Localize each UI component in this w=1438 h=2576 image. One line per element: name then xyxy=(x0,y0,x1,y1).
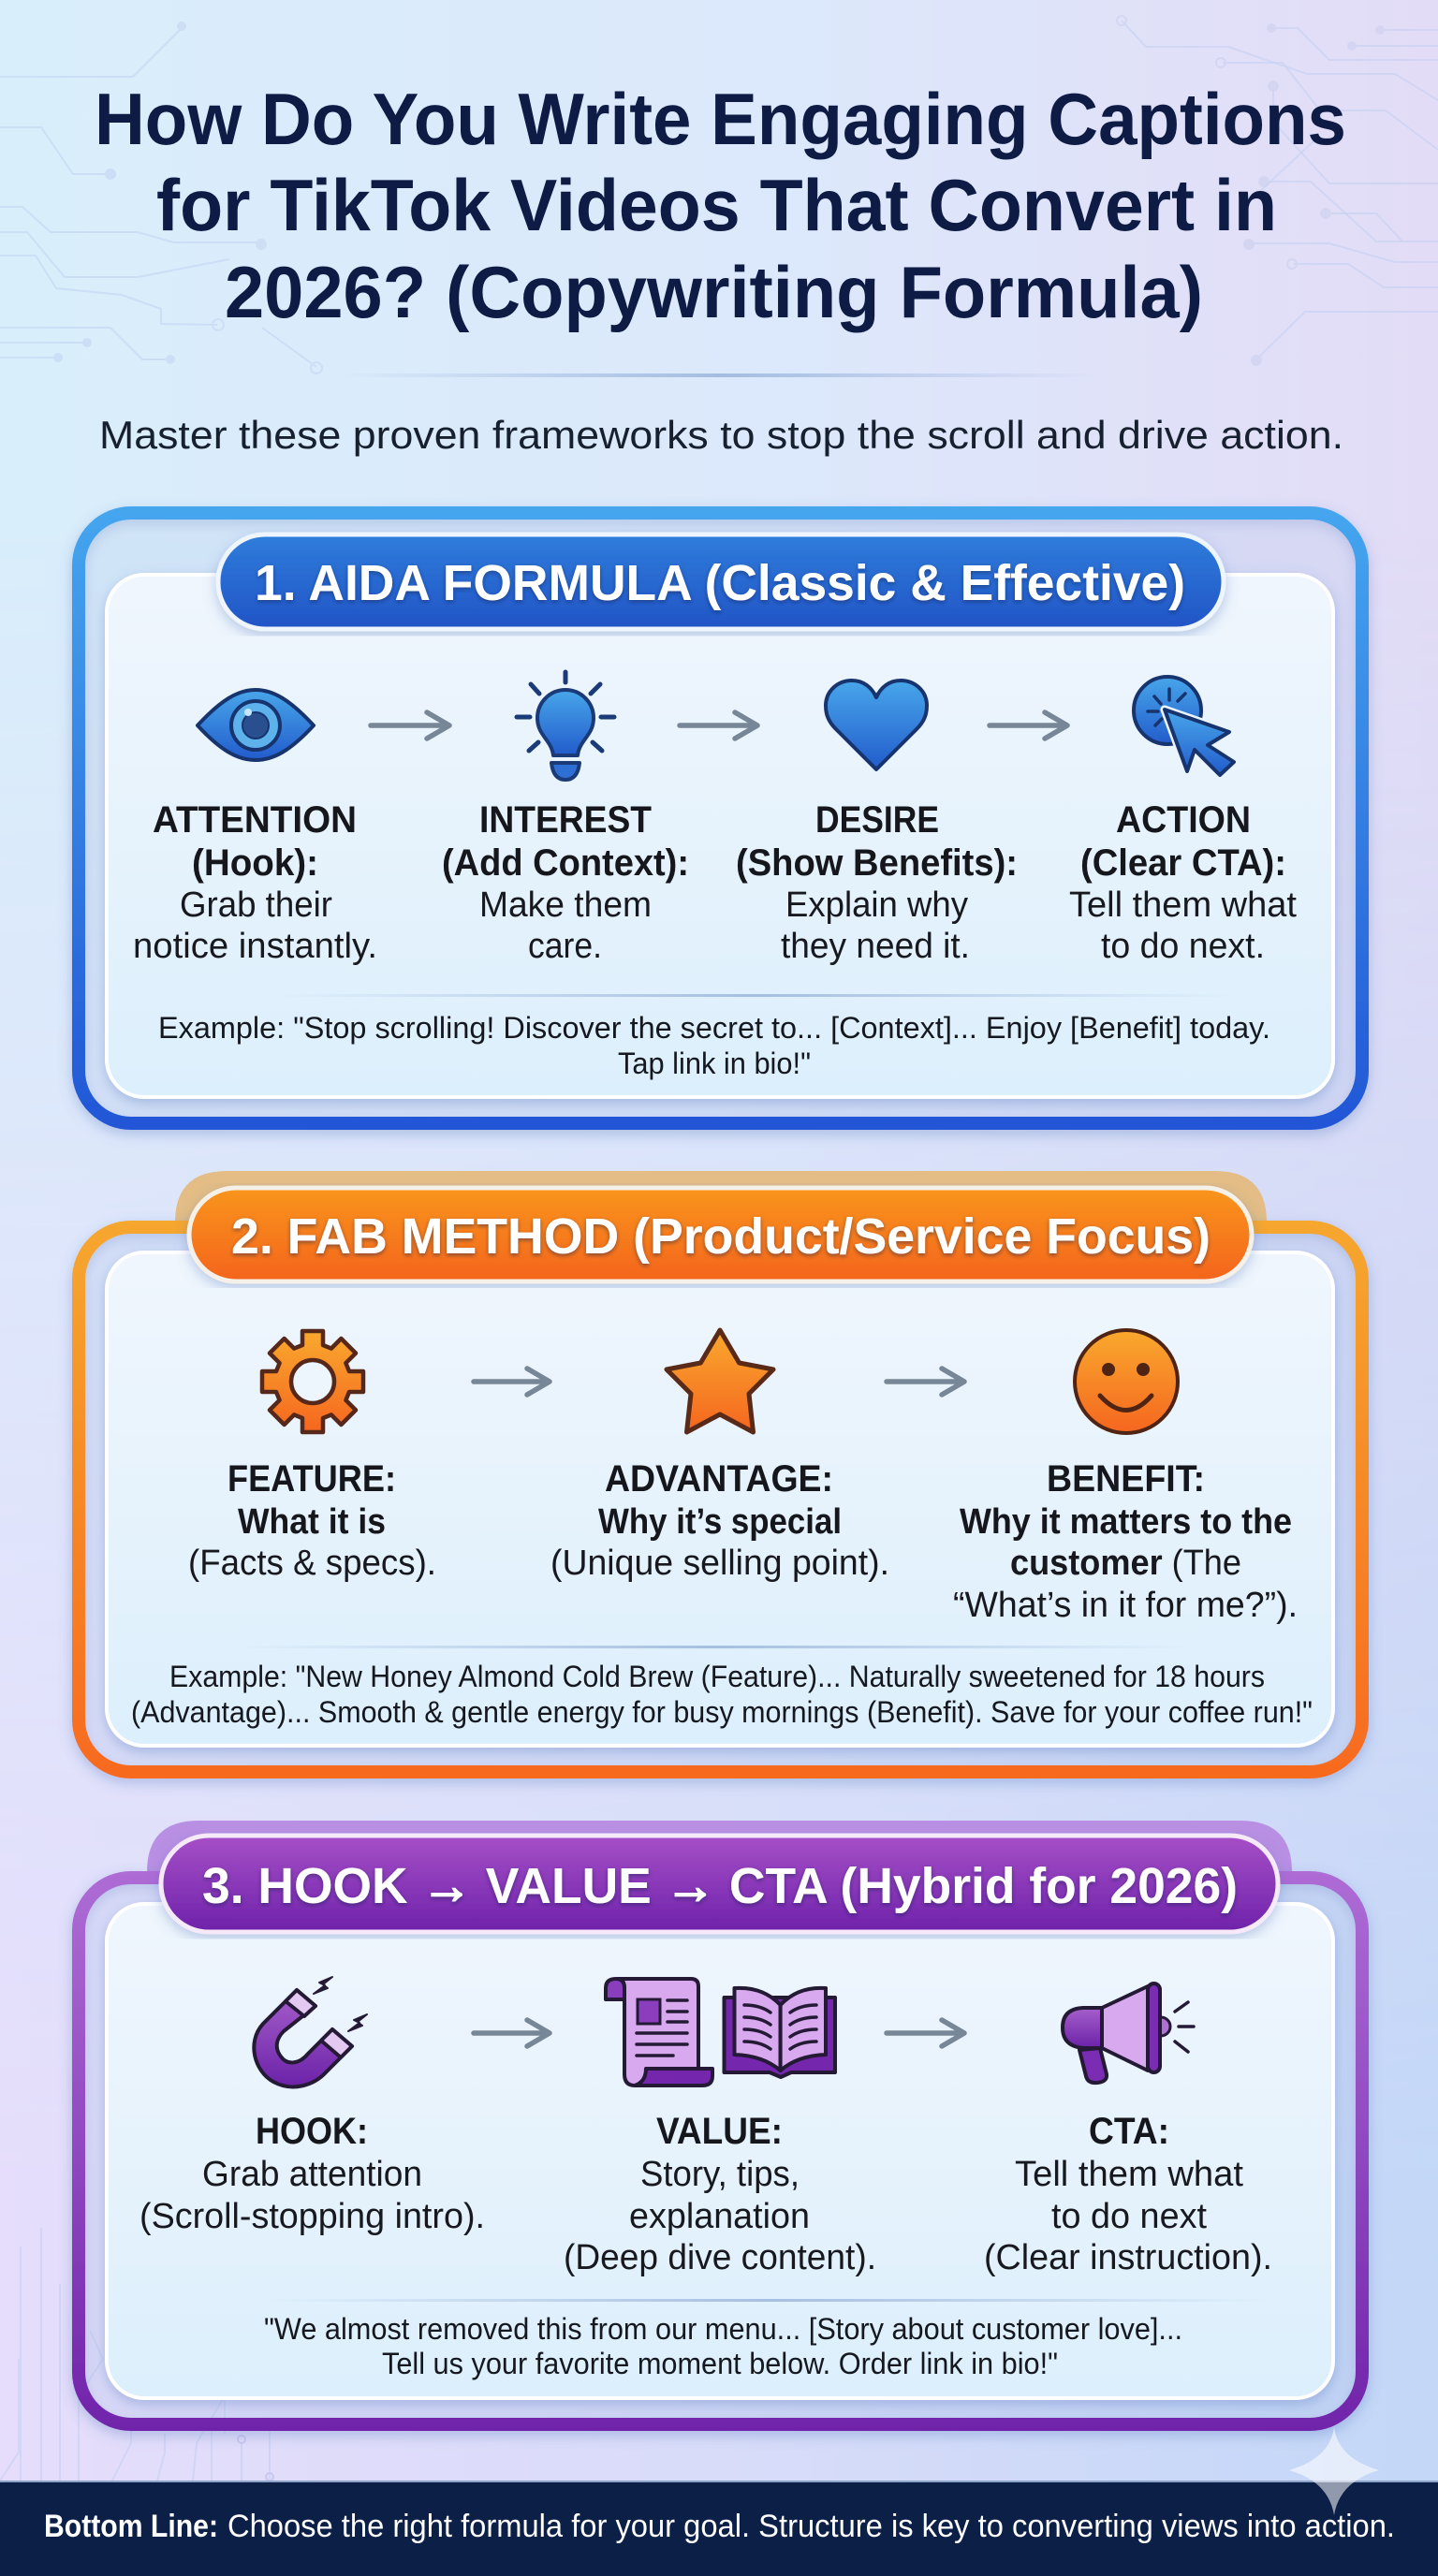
column: benefit xyxy=(953,1458,1298,1625)
column: advantage: (Unique selling point). xyxy=(550,1544,889,1583)
title: How Do You Write Engaging Captions xyxy=(95,78,1346,160)
step: desire: Explain why xyxy=(785,886,968,925)
arrow xyxy=(474,2020,550,2046)
step: desire: they need it. xyxy=(781,927,970,966)
step: interest: care. xyxy=(528,927,602,966)
example text: Hook Value CTA: Tell us your favorite moment below. Order link in bio!" xyxy=(382,2347,1058,2380)
icon: megaphone xyxy=(1063,1983,1194,2083)
column: benefit: “What’s in it for me?”). xyxy=(953,1586,1298,1625)
step: action: to do next. xyxy=(1101,927,1265,966)
step: interest xyxy=(442,799,689,966)
column: cta: (Clear instruction). xyxy=(984,2238,1272,2277)
column: hook: Grab attention xyxy=(202,2155,422,2194)
column: advantage: Why it’s special xyxy=(598,1502,842,1542)
arrow xyxy=(887,1368,964,1395)
arrow xyxy=(474,1368,550,1395)
step: desire xyxy=(736,799,1018,966)
step: action: Tell them what xyxy=(1069,886,1297,925)
heading pill: Hook Value CTA: 3. HOOK → VALUE → CTA (Hybrid for 2026) xyxy=(202,1858,1238,1914)
step: action: ACTION xyxy=(1116,799,1251,841)
icon: heart xyxy=(826,681,927,769)
heading pill: AIDA: 1. AIDA FORMULA (Classic & Effective) xyxy=(255,555,1185,611)
column: benefit: BENEFIT: xyxy=(1047,1458,1205,1500)
column: cta: to do next xyxy=(1051,2197,1207,2236)
column: cta: Tell them what xyxy=(1015,2155,1243,2194)
icon: eye xyxy=(198,690,314,760)
column: feature: (Facts & specs). xyxy=(188,1544,436,1583)
icon: star xyxy=(667,1330,773,1432)
column: value: VALUE: xyxy=(656,2111,783,2152)
example text: FAB: (Advantage)... Smooth & gentle energy for busy mornings (Benefit). Save for your coffee run!" xyxy=(131,1695,1313,1729)
icon: magnet xyxy=(254,1977,367,2086)
heading pill: FAB xyxy=(189,1188,1252,1281)
step: attention: (Hook): xyxy=(192,842,318,884)
step: interest: Make them xyxy=(479,886,652,925)
example text: FAB xyxy=(131,1660,1313,1729)
icon: smiley xyxy=(1075,1330,1178,1433)
example text: AIDA: Example: "Stop scrolling! Discover the secret to... [Context]... Enjoy [Benefit] today. xyxy=(158,1011,1270,1045)
heading pill: Hook Value CTA xyxy=(161,1836,1278,1932)
circuit pattern: top left xyxy=(0,22,322,373)
step: desire: DESIRE xyxy=(815,799,939,841)
step: attention: Grab their xyxy=(180,886,332,925)
step: attention: notice instantly. xyxy=(133,927,377,966)
example text: AIDA: Tap link in bio!" xyxy=(618,1046,811,1080)
column: feature: FEATURE: xyxy=(227,1458,396,1500)
column: hook: HOOK: xyxy=(256,2111,368,2152)
step: desire: (Show Benefits): xyxy=(736,842,1018,884)
footer bar: Choose the right formula for your goal. Structure is key to converting views into action. xyxy=(227,2509,1395,2544)
step: attention: ATTENTION xyxy=(153,799,357,841)
title: for TikTok Videos That Convert in xyxy=(156,164,1277,246)
example text: FAB: Example: "New Honey Almond Cold Brew (Feature)... Naturally sweetened for 18 hours xyxy=(169,1660,1265,1693)
circuit pattern: bottom left xyxy=(0,2228,273,2481)
icon: gear xyxy=(262,1331,363,1432)
icon: scroll and book xyxy=(606,1979,835,2086)
panel: FAB method xyxy=(79,1171,1362,1772)
column: feature: What it is xyxy=(238,1502,386,1542)
example text: AIDA xyxy=(158,1011,1270,1080)
column: advantage: ADVANTAGE: xyxy=(605,1458,833,1500)
subtitle: Master these proven frameworks to stop the scroll and drive action. xyxy=(99,413,1343,457)
column: feature xyxy=(188,1458,436,1583)
step: interest: INTEREST xyxy=(479,799,652,841)
column: cta xyxy=(984,2111,1272,2277)
step: attention xyxy=(133,799,377,966)
example text: Hook Value CTA: "We almost removed this from our menu... [Story about customer love]... xyxy=(264,2312,1182,2346)
arrow xyxy=(371,712,449,739)
step: interest: (Add Context): xyxy=(442,842,689,884)
column: value: (Deep dive content). xyxy=(564,2238,876,2277)
column: hook: (Scroll-stopping intro). xyxy=(139,2197,485,2236)
column: benefit: customer (The xyxy=(1010,1544,1241,1583)
column: value: explanation xyxy=(629,2197,810,2236)
title: 2026? (Copywriting Formula) xyxy=(225,251,1203,333)
column: cta: CTA: xyxy=(1089,2111,1169,2152)
arrow xyxy=(887,2020,964,2046)
step: action xyxy=(1069,799,1297,966)
column: advantage xyxy=(550,1458,889,1583)
arrow xyxy=(680,712,757,739)
step: action: (Clear CTA): xyxy=(1080,842,1286,884)
heading pill: FAB: 2. FAB METHOD (Product/Service Focus) xyxy=(231,1208,1211,1265)
icon: click cursor xyxy=(1134,677,1234,775)
icon: sparkle xyxy=(1289,2427,1379,2515)
footer bar xyxy=(0,2481,1438,2576)
arrow xyxy=(990,712,1067,739)
circuit pattern: top right xyxy=(1117,16,1438,366)
title xyxy=(95,78,1346,333)
column: value xyxy=(564,2111,876,2277)
column: hook xyxy=(139,2111,485,2236)
panel: Hook Value CTA xyxy=(79,1821,1362,2424)
column: value: Story, tips, xyxy=(640,2155,800,2194)
panel: AIDA formula xyxy=(79,513,1362,1123)
icon: light bulb xyxy=(517,672,614,780)
column: benefit: Why it matters to the xyxy=(960,1502,1292,1542)
footer bar: Bottom Line: xyxy=(44,2509,218,2544)
heading pill: AIDA xyxy=(218,534,1224,629)
example text: Hook Value CTA xyxy=(264,2312,1182,2380)
